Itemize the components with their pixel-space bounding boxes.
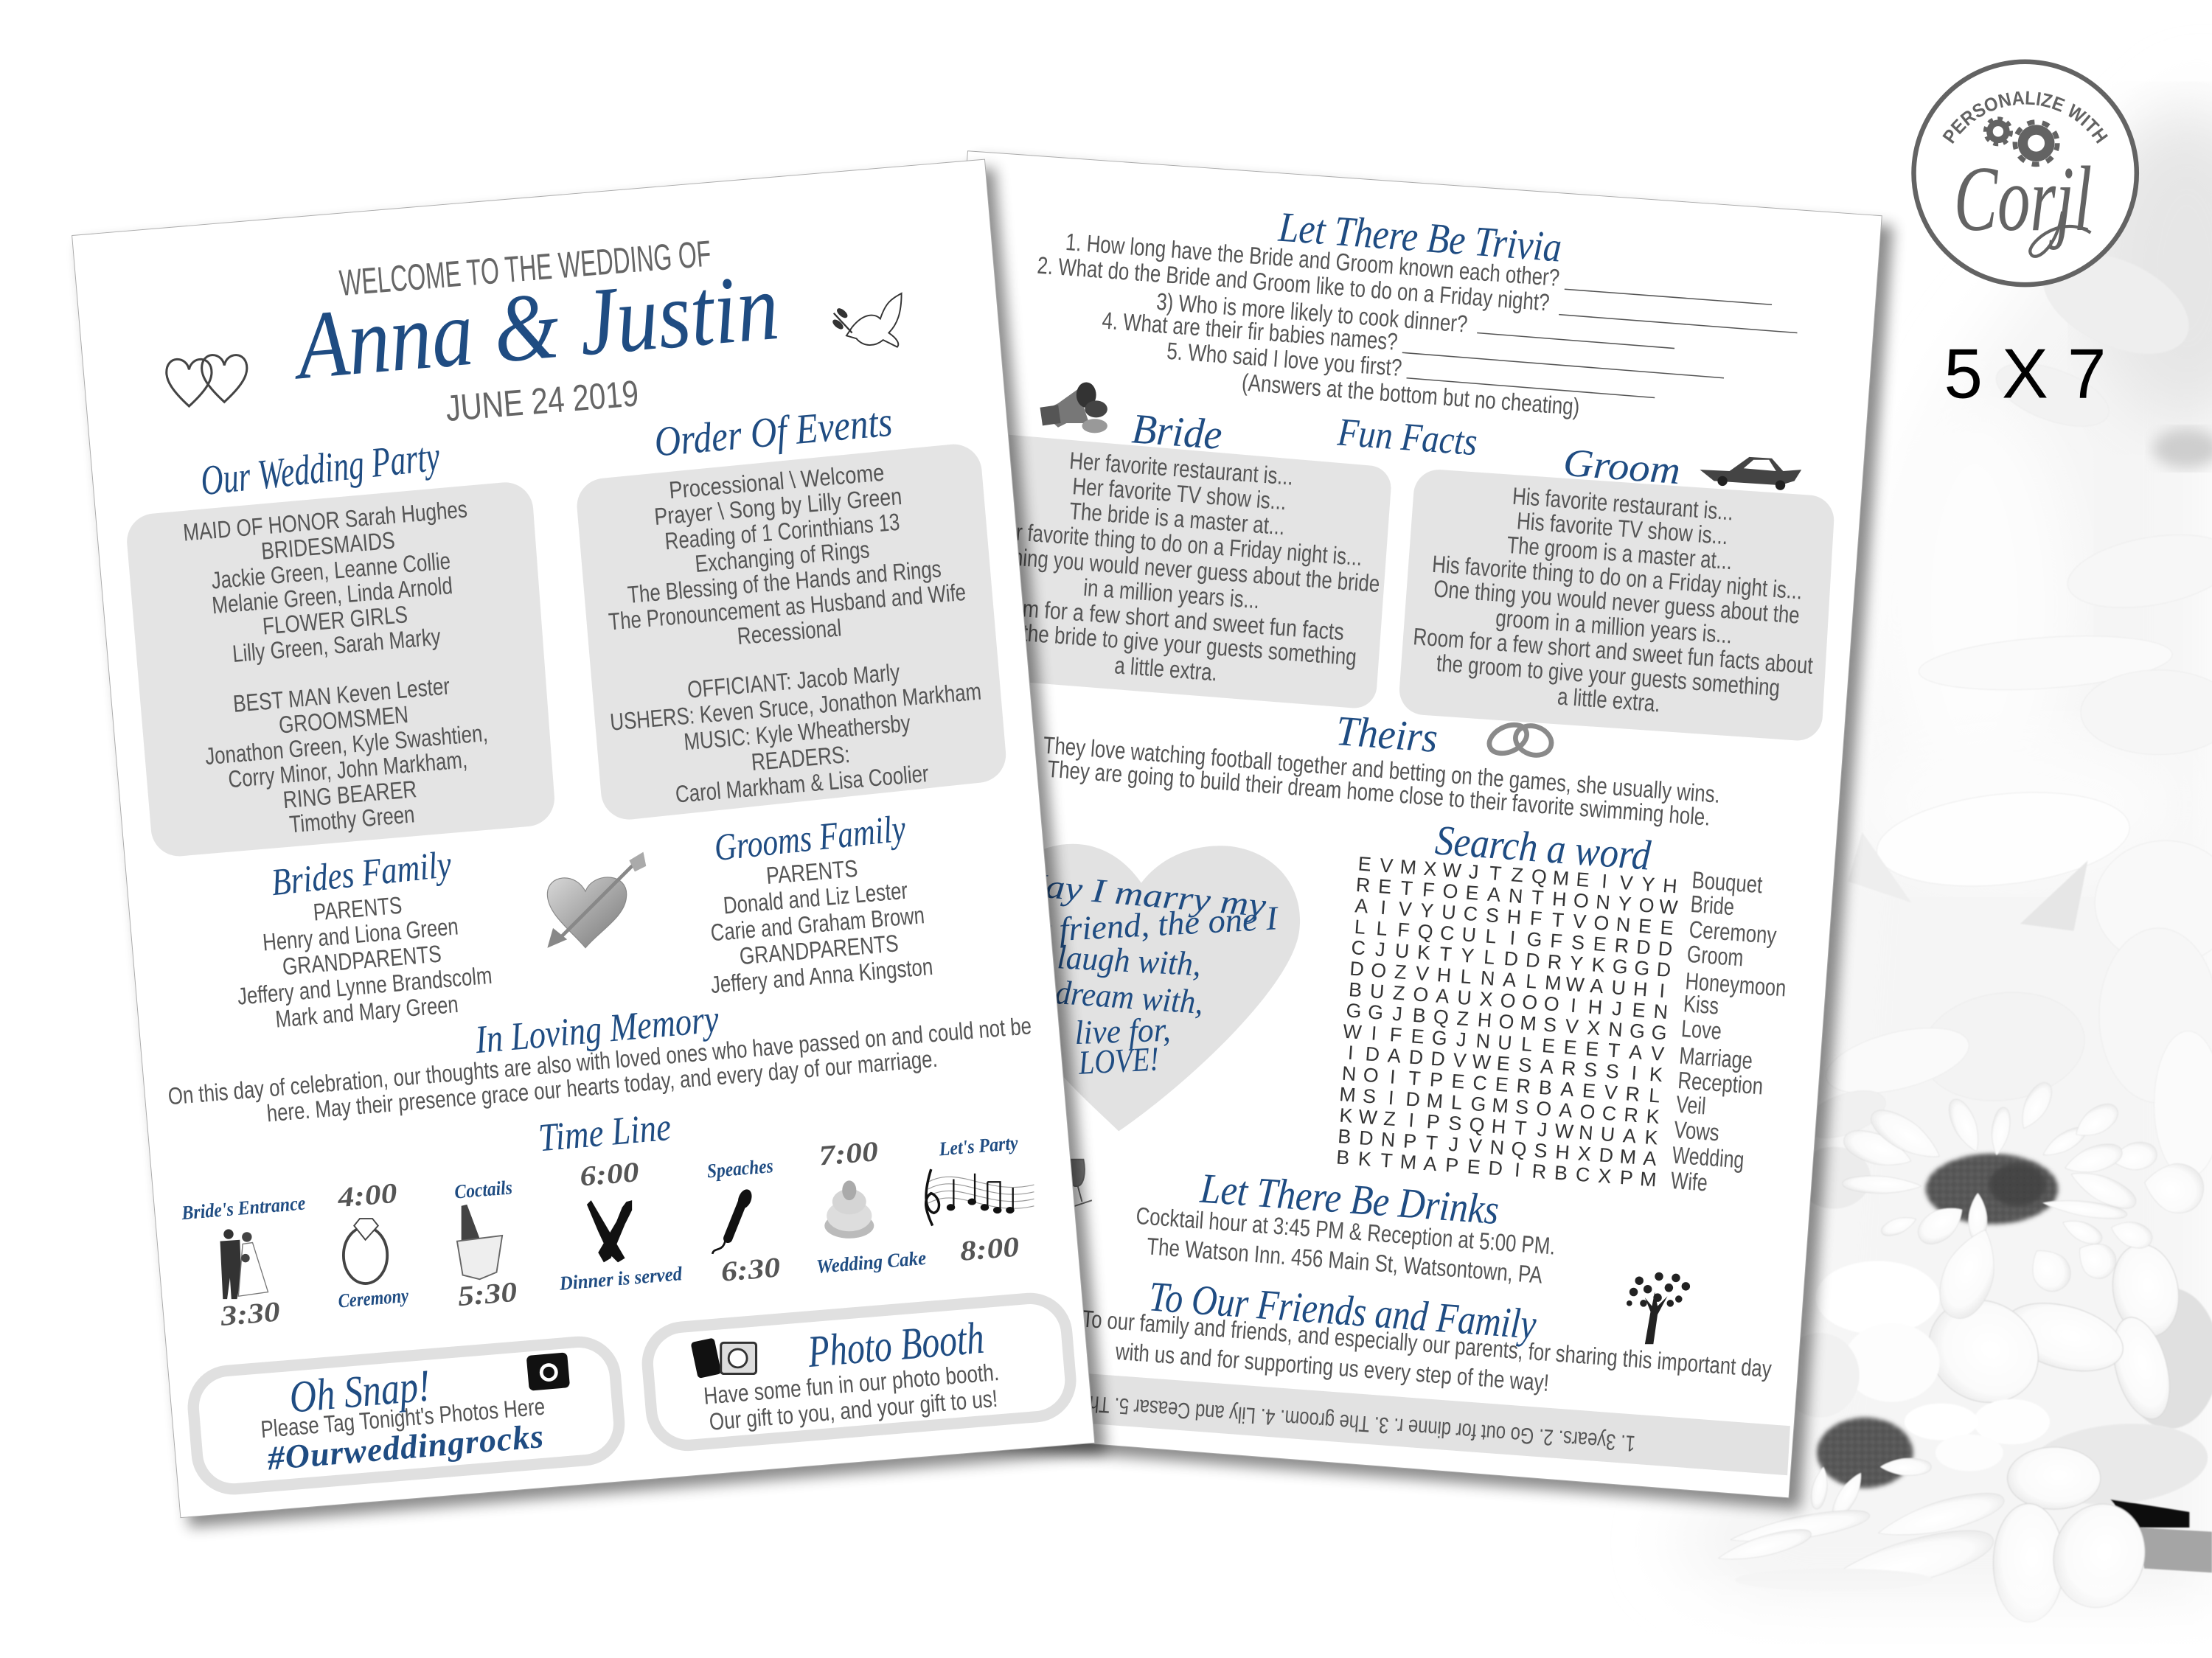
heading: Brides Family: Brides Family <box>269 843 453 904</box>
text: memorial paragraph: here. May their presence grace our hearts today, and every day of our marriage. <box>265 1045 939 1126</box>
panel: groom fun facts: One thing you would never guess about the <box>1433 575 1801 629</box>
trivia questions: 2. What do the Bride and Groom like to do on a Friday night? <box>1037 252 1551 316</box>
icon: interlocked hearts <box>167 355 247 406</box>
panel: Oh Snap hashtag <box>190 1339 622 1492</box>
word search list: Bride <box>1690 891 1735 920</box>
word search grid: RETFOEANTHONYOW <box>1355 874 1679 919</box>
text: grooms family names: GRANDPARENTS <box>738 930 900 969</box>
trivia questions: 3) Who is more likely to cook dinner? <box>1155 288 1469 338</box>
heading: Theirs: Theirs <box>1335 708 1439 762</box>
panel: groom fun facts: His favorite TV show is... <box>1516 507 1729 549</box>
timeline: dinner 6:00: 6:00 <box>579 1157 640 1192</box>
text: brides family names: Mark and Mary Green <box>274 991 459 1033</box>
timeline: cocktails 5:30 <box>453 1176 518 1312</box>
heading: Order Of Events: Order Of Events <box>653 399 894 466</box>
timeline: ceremony 4:00 <box>335 1178 409 1312</box>
timeline: speeches 6:30 <box>706 1154 782 1288</box>
panel: heart with vow text: best friend, the one I <box>995 899 1280 951</box>
timeline: cocktails 5:30: Coctails <box>453 1176 513 1203</box>
heading: Grooms Family: Grooms Family <box>712 807 908 869</box>
panel: bride fun facts: One thing you would never guess about the bride <box>965 540 1381 597</box>
panel: wedding party: Jackie Green, Leanne Collie <box>210 547 451 594</box>
heading: Groom: Groom <box>1562 440 1682 492</box>
panel: groom fun facts: His favorite restaurant is... <box>1512 483 1734 525</box>
panel: bride fun facts: Room for a few short and sweet fun facts <box>986 593 1345 645</box>
text: grooms family names: Jeffery and Anna Kingston <box>709 953 934 998</box>
word search list: Honeymoon <box>1684 968 1787 1002</box>
timeline: let's party 8:00: 8:00 <box>959 1231 1020 1267</box>
word search list: Wedding <box>1672 1142 1745 1174</box>
text: drinks details: The Watson Inn. 456 Main St, Watsontown, PA <box>1146 1233 1543 1289</box>
text: welcome line: WELCOME TO THE WEDDING OF <box>338 233 712 304</box>
panel: order of events: Recessional <box>736 614 843 649</box>
text: brides family names: GRANDPARENTS <box>282 940 442 980</box>
heading: Search a word: Search a word <box>1433 817 1652 879</box>
text: brides family names: Henry and Liona Green <box>262 913 459 956</box>
trivia questions: (Answers at the bottom but no cheating) <box>1241 369 1581 420</box>
panel: bride fun facts: Her favorite restaurant is... <box>1068 447 1294 490</box>
timeline: dinner 6:00 <box>558 1157 684 1295</box>
text: theirs facts: They love watching football together and betting on the games, she usually wins. <box>1043 732 1721 808</box>
heading: Time Line: Time Line <box>537 1104 672 1160</box>
badge: personalize with Corjl: PERSONALIZE WITH <box>1942 91 2108 144</box>
panel: order of events: USHERS: Keven Sruce, Jonathon Markham <box>609 678 982 736</box>
timeline: let's party 8:00: Let's Party <box>938 1132 1019 1160</box>
panel: order of events: Reading of 1 Corinthians 13 <box>664 509 901 554</box>
timeline: bride's entrance 3:30: 3:30 <box>219 1296 281 1332</box>
background: white chrysanthemum flowers <box>1622 85 2212 1658</box>
panel: order of events: Carol Markham & Lisa Coolier <box>675 760 930 808</box>
text: drinks details: Cocktail hour at 3:45 PM & Reception at 5:00 PM. <box>1135 1202 1557 1260</box>
heading: In Loving Memory: In Loving Memory <box>473 997 720 1062</box>
panel: left page (front of program) <box>72 159 1106 1528</box>
heading: Let There Be Drinks: Let There Be Drinks <box>1198 1166 1500 1233</box>
panel: heart with vow text <box>987 844 1300 1131</box>
timeline: speeches 6:30: Speaches <box>706 1154 774 1182</box>
heading: Bride: Bride <box>1130 405 1224 459</box>
panel: Oh Snap hashtag: Please Tag Tonight's Photos Here <box>260 1393 546 1443</box>
title: couple names: Anna & Justin <box>288 254 782 400</box>
text: memorial paragraph <box>167 1012 1032 1126</box>
panel: wedding party: Timothy Green <box>288 801 416 837</box>
panel: order of events: Exchanging of Rings <box>694 536 871 577</box>
text: brides family names: PARENTS <box>313 892 403 926</box>
heading: Let There Be Trivia: Let There Be Trivia <box>1276 204 1563 271</box>
icon: classic car <box>1700 457 1801 490</box>
word search list: Love <box>1680 1015 1722 1045</box>
word search grid: LLFQCULIGFSERDD <box>1354 916 1673 961</box>
panel: wedding party: Melanie Green, Linda Arnold <box>211 572 453 619</box>
timeline: bride's entrance 3:30 <box>180 1191 307 1332</box>
word search grid: IDADDVWESARSSIK <box>1347 1042 1663 1086</box>
panel: heart with vow text: dream with, <box>1054 973 1205 1021</box>
badge: personalize with Corjl <box>1911 59 2140 288</box>
word search grid: CJUKTYLDDRYKGGD <box>1351 936 1672 981</box>
panel: bride fun facts: The bride is a master at... <box>1068 498 1286 540</box>
word search list: Veil <box>1675 1091 1707 1120</box>
text: grooms family names: Donald and Liz Lester <box>723 877 908 919</box>
word search list: Ceremony <box>1688 916 1778 949</box>
trivia questions: 5. Who said I love you first? <box>1166 338 1403 381</box>
panel: order of events: The Blessing of the Hands and Rings <box>627 555 942 608</box>
word search list <box>1670 866 1787 1197</box>
word search grid: EVMXWJTZQMEIVYH <box>1357 852 1678 897</box>
icon: wedding rings <box>1485 720 1556 760</box>
word search grid: BDNPTJVNQSHXDMA <box>1337 1125 1658 1170</box>
word search list: Bouquet <box>1691 866 1764 898</box>
panel: Oh Snap hashtag: Oh Snap! <box>288 1360 432 1423</box>
icon: wine glass <box>1069 1160 1092 1208</box>
word search list: Reception <box>1677 1067 1764 1100</box>
panel: order of events: OFFICIANT: Jacob Marly <box>686 659 901 703</box>
panel: groom fun facts: the groom to give your guests something <box>1436 649 1781 701</box>
icon: instagram camera <box>526 1352 570 1391</box>
timeline: bride's entrance 3:30: Bride's Entrance <box>180 1191 307 1224</box>
panel: bride fun facts: a little extra. <box>1113 652 1218 686</box>
heading: Our Wedding Party: Our Wedding Party <box>198 433 442 504</box>
band: upside-down trivia answers <box>1065 1373 1790 1475</box>
panel: Photo Booth: Photo Booth <box>805 1313 986 1377</box>
timeline: let's party 8:00 <box>926 1132 1034 1267</box>
timeline: cocktails 5:30: 5:30 <box>456 1277 518 1312</box>
band: upside-down trivia answers: 1. 3years. 2. Go out for dinne r. 3. The groom. 4. Lily and Ceasar 5. Th <box>1088 1391 1636 1456</box>
panel: wedding party: Lilly Green, Sarah Marky <box>232 623 442 667</box>
panel: heart with vow text: laugh with, <box>1057 938 1202 983</box>
word search list: Marriage <box>1678 1042 1753 1074</box>
panel: groom fun facts <box>1412 483 1814 717</box>
panel: groom fun facts: groom in a million years is... <box>1495 605 1733 649</box>
icon: heart with arrow <box>547 852 646 948</box>
icon: dove <box>832 293 902 347</box>
text: drinks details <box>1135 1202 1557 1289</box>
panel: heart with vow text: live for, <box>1074 1011 1171 1051</box>
text: thank you: To our family and friends, and especially our parents, for sharing this important day <box>1081 1306 1773 1382</box>
word search grid <box>1335 852 1679 1191</box>
panel: wedding party: Jonathon Green, Kyle Swashtien, <box>204 720 489 770</box>
heading: To Our Friends and Family: To Our Friends and Family <box>1147 1273 1538 1348</box>
text: grooms family names: Carie and Graham Brown <box>709 902 925 946</box>
panel: heart with vow text: LOVE! <box>1077 1039 1160 1081</box>
timeline: wedding cake 7:00: Wedding Cake <box>815 1247 927 1278</box>
text: grooms family names: PARENTS <box>765 855 859 889</box>
panel: wedding party: RING BEARER <box>282 776 418 813</box>
text: thank you: with us and for supporting us every step of the way! <box>1114 1338 1550 1396</box>
panel: bride fun facts: Her favorite thing to do on a Friday night is... <box>991 517 1363 571</box>
panel: right page (back of program) <box>877 151 1893 1509</box>
panel: wedding party: MAID OF HONOR Sarah Hughes <box>182 495 468 546</box>
word search grid: MSIDMLGMSOAOCRK <box>1338 1083 1660 1128</box>
panel: bride fun facts: for the bride to give your guests something <box>994 618 1357 670</box>
word search grid: BUZOAUXOOOIHJEN <box>1348 978 1669 1023</box>
word search grid: NOITPECERBAEVRL <box>1341 1062 1660 1107</box>
timeline: dinner 6:00: Dinner is served <box>558 1262 684 1295</box>
badge: personalize with Corjl: Corjl <box>1954 147 2092 251</box>
word search list: Groom <box>1686 941 1745 971</box>
size label: 5 X 7: 5 X 7 <box>1944 335 2106 414</box>
word search grid: KWZIPSQHTJWNUAK <box>1339 1104 1659 1149</box>
trivia questions <box>1037 229 1797 420</box>
panel: wedding party: BRIDESMAIDS <box>260 527 396 565</box>
word search list: Wife <box>1670 1167 1708 1197</box>
panel: wedding party: BEST MAN Keven Lester <box>232 672 451 717</box>
panel: order of events: The Pronouncement as Husband and Wife <box>608 579 967 635</box>
panel: wedding party: Corry Minor, John Markham, <box>227 746 468 793</box>
timeline: ceremony 4:00: Ceremony <box>337 1284 409 1312</box>
panel: bride fun facts <box>959 447 1381 686</box>
word search list: Kiss <box>1683 990 1719 1020</box>
panel: wedding party <box>155 495 526 837</box>
timeline: ceremony 4:00: 4:00 <box>335 1178 398 1213</box>
panel: order of events: MUSIC: Kyle Wheathersby <box>683 710 912 755</box>
trivia questions: 1. How long have the Bride and Groom known each other? <box>1065 229 1560 291</box>
panel: order of events: Processional \ Welcome <box>668 459 886 504</box>
word search list: Vows <box>1673 1116 1720 1146</box>
panel: groom fun facts: a little extra. <box>1557 683 1661 717</box>
panel: Photo Booth <box>644 1295 1074 1448</box>
word search grid: GGJBQZHOMSVXNGG <box>1346 999 1668 1044</box>
text: theirs facts: They are going to build their dream home close to their favorite swimming hole. <box>1046 756 1711 831</box>
word search grid: BKTMAPEDIRBCXPM <box>1335 1146 1658 1191</box>
panel: Oh Snap hashtag: #Ourweddingrocks <box>265 1417 545 1477</box>
panel: Photo Booth: Have some fun in our photo booth. <box>703 1359 1000 1410</box>
panel: bride fun facts: Her favorite TV show is... <box>1071 473 1287 515</box>
word search grid: WIFEGJNULEEETAV <box>1342 1020 1665 1065</box>
panel: wedding party: FLOWER GIRLS <box>262 601 408 640</box>
text: brides family names <box>237 892 493 1033</box>
panel: order of events <box>605 459 982 808</box>
panel: order of events: READERS: <box>751 741 851 776</box>
panel: groom fun facts: Room for a few short and sweet fun facts about <box>1412 623 1814 679</box>
panel: Photo Booth: Our gift to you, and your gift to us! <box>708 1385 998 1435</box>
heading: Fun Facts: Fun Facts <box>1335 409 1478 464</box>
icon: tree <box>1627 1272 1690 1344</box>
text: date: JUNE 24 2019 <box>444 372 640 429</box>
timeline: speeches 6:30: 6:30 <box>720 1252 782 1288</box>
text: memorial paragraph: On this day of celebration, our thoughts are also with loved ones who have passed on and could not be <box>167 1012 1032 1110</box>
panel: heart with vow text: May I marry my <box>1010 864 1268 924</box>
panel: groom fun facts: His favorite thing to do on a Friday night is... <box>1431 551 1804 605</box>
icon: bouquet <box>1040 382 1107 433</box>
panel: order of events: Prayer \ Song by Lilly Green <box>653 483 902 530</box>
text: grooms family names <box>709 855 934 998</box>
panel: wedding party: GROOMSMEN <box>278 701 409 739</box>
timeline: wedding cake 7:00: 7:00 <box>818 1136 880 1172</box>
timeline: wedding cake 7:00 <box>815 1136 927 1278</box>
panel: bride fun facts: in a million years is... <box>1082 574 1260 613</box>
word search grid: AIVYUCSHFTVONEE <box>1354 894 1674 939</box>
word search grid: DOZVHLNALMWAUHI <box>1349 958 1666 1002</box>
icon: phone and camera <box>691 1338 757 1379</box>
text: brides family names: Jeffery and Lynne Brandscolm <box>237 962 493 1010</box>
panel: groom fun facts: The groom is a master at... <box>1506 532 1733 574</box>
trivia questions: 4. What are their fir babies names? <box>1102 307 1399 355</box>
